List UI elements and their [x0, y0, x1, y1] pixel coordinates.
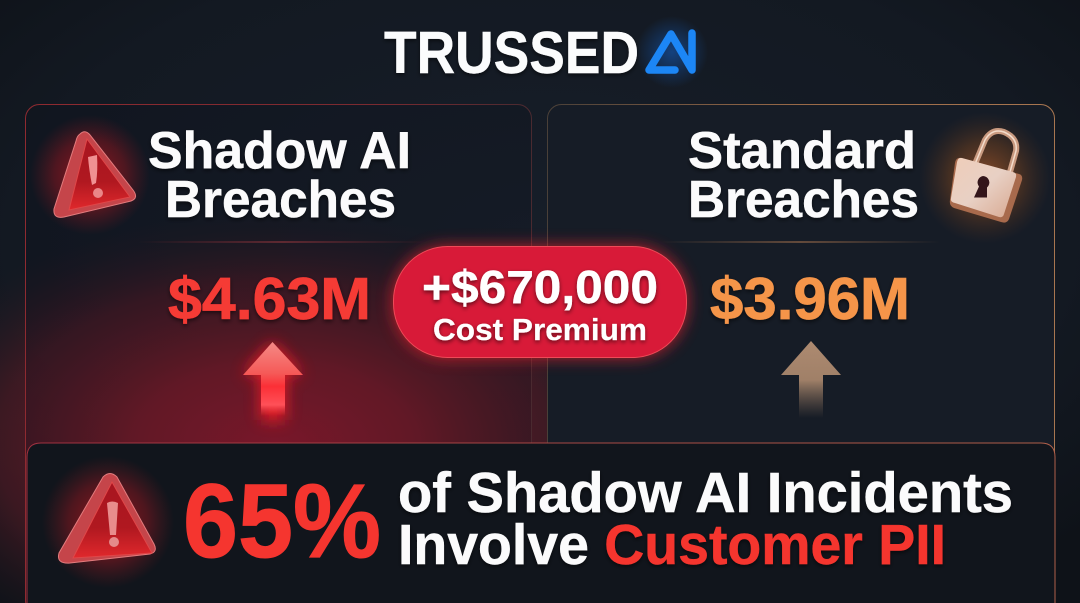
stat description: of Shadow AI Incidents [398, 461, 1013, 525]
divider [660, 242, 940, 243]
stat description: Involve Customer PII [398, 513, 946, 577]
heading: Standard Breaches [688, 122, 919, 229]
stat description [398, 461, 1013, 577]
panel: Standard breaches [548, 104, 1054, 603]
heading: Standard Breaches: Breaches [688, 171, 919, 229]
value: $4.63M: $4.63M [168, 266, 371, 332]
red ambient glow [0, 200, 680, 603]
logo AI mark [636, 16, 708, 88]
value: $3.96M: $3.96M [710, 266, 910, 332]
arrow: up red [243, 342, 303, 420]
panel frame [26, 104, 532, 603]
logo: TRUSSED AI [384, 16, 708, 88]
divider [138, 242, 428, 243]
logo wordmark: TRUSSED [384, 20, 639, 86]
panel: Shadow AI breaches [26, 104, 532, 603]
panel: 65% PII stat [27, 443, 1055, 603]
arrow: up tan [781, 341, 841, 418]
stat: 65%: 65% [183, 463, 381, 580]
icon: padlock [919, 112, 1051, 244]
premium label: Cost Premium [433, 312, 647, 347]
icon: warning triangle [42, 456, 174, 588]
panel frame [27, 443, 1055, 603]
heading: Shadow AI Breaches: Breaches [165, 171, 396, 229]
callout: cost premium pill [393, 246, 687, 358]
premium amount: +$670,000 [422, 261, 658, 313]
heading: Shadow AI Breaches [148, 122, 411, 229]
panel frame [548, 104, 1054, 603]
heading: Shadow AI Breaches: Shadow AI [148, 122, 411, 180]
icon: warning triangle [30, 115, 150, 235]
heading: Standard Breaches: Standard [688, 122, 916, 180]
